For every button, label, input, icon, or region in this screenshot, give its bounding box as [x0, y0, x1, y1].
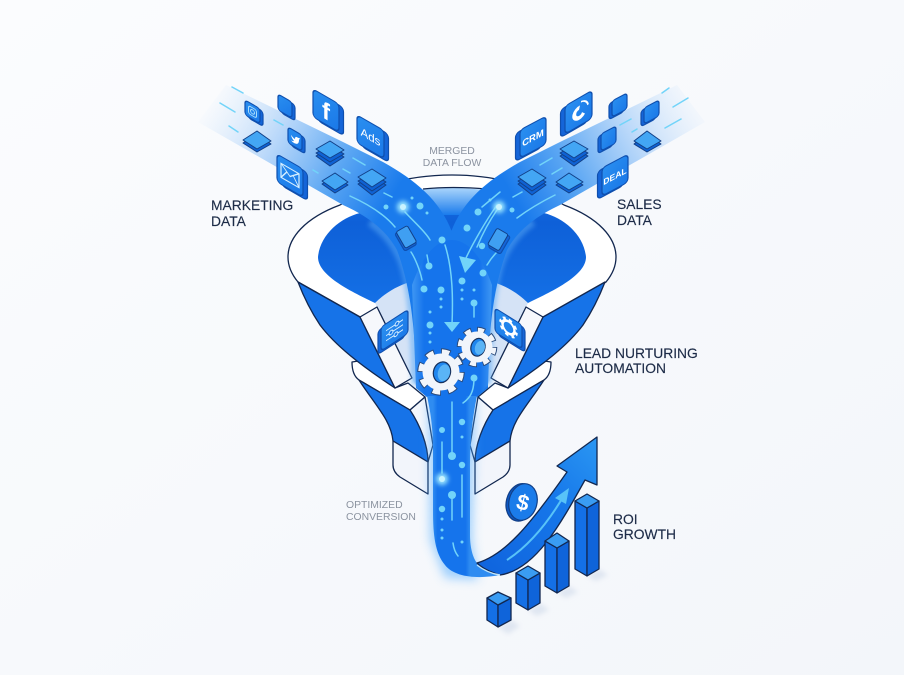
icon: data stack [316, 141, 344, 166]
bar 2 [516, 566, 540, 610]
funnel inner back edge [423, 188, 487, 189]
label: roi growth: GROWTH [613, 526, 676, 542]
icon: instagram card [245, 100, 263, 126]
gear small [460, 330, 494, 364]
icon: flat tile [634, 131, 661, 152]
icon: blank card [609, 93, 627, 120]
label: lead nurturing automation: LEAD NURTURING [575, 345, 698, 361]
icon: twitter card [288, 127, 305, 154]
icon: flat tile [322, 173, 348, 193]
label: marketing data: MARKETING [211, 197, 293, 213]
gear large [421, 352, 461, 392]
label: optimized conversion: OPTIMIZED [346, 500, 403, 511]
icon: data stack [518, 169, 546, 195]
icon: flat tile [243, 131, 271, 152]
funnel [288, 175, 616, 494]
icon: dollar coin [502, 480, 541, 525]
icon: ads card: Ads [361, 125, 380, 149]
label: merged data flow: MERGED [429, 146, 475, 157]
icon: dollar coin: $ [514, 489, 532, 516]
label: sales data: SALES [617, 196, 662, 212]
icon: facebook card [313, 89, 344, 136]
label: lead nurturing automation: AUTOMATION [575, 360, 666, 376]
icon: data stack [560, 141, 588, 166]
label: marketing data: DATA [211, 213, 247, 229]
left marketing data stream [198, 85, 452, 397]
merged central stream [412, 240, 492, 397]
label: optimized conversion: CONVERSION [346, 512, 416, 523]
icon: blank card [278, 94, 295, 121]
stream edge glow [370, 222, 533, 385]
arrow body [477, 437, 597, 575]
icon: blank card [598, 126, 616, 154]
growth arrow [477, 437, 597, 575]
icon: blank card [641, 100, 659, 127]
funnel back highlight [420, 188, 484, 215]
funnel interior [318, 188, 586, 303]
bar shadows [498, 569, 608, 634]
icon: mail card [277, 154, 308, 201]
lower stream column [427, 396, 500, 577]
small card left [394, 226, 418, 251]
icon: deal card [598, 154, 628, 199]
bar 3 [545, 533, 569, 593]
funnel right tiers [470, 282, 605, 494]
stream particles [220, 87, 688, 556]
arrow inner highlight [507, 492, 566, 560]
icon: flat tile [556, 173, 583, 193]
icon: sliders card [378, 309, 408, 354]
bar 1 [487, 592, 511, 627]
icon: ads card [357, 115, 388, 162]
icon: gear card [495, 308, 525, 352]
small card right [486, 228, 511, 254]
bar chart [487, 494, 608, 634]
bar 4 [575, 494, 599, 576]
stream glow [428, 400, 478, 580]
icon: deal card: DEAL [603, 165, 627, 187]
funnel left tiers [298, 282, 433, 494]
icon: call card [560, 90, 592, 138]
icon: facebook card: f [322, 97, 330, 128]
funnel top rim [288, 175, 616, 317]
label: merged data flow: DATA FLOW [423, 158, 481, 169]
label: sales data: DATA [617, 212, 653, 228]
icon: data stack [358, 169, 386, 195]
icon: crm card [516, 116, 546, 161]
icon: crm card: CRM [522, 128, 544, 150]
right sales data stream [451, 85, 705, 397]
label: roi growth: ROI [613, 511, 638, 527]
